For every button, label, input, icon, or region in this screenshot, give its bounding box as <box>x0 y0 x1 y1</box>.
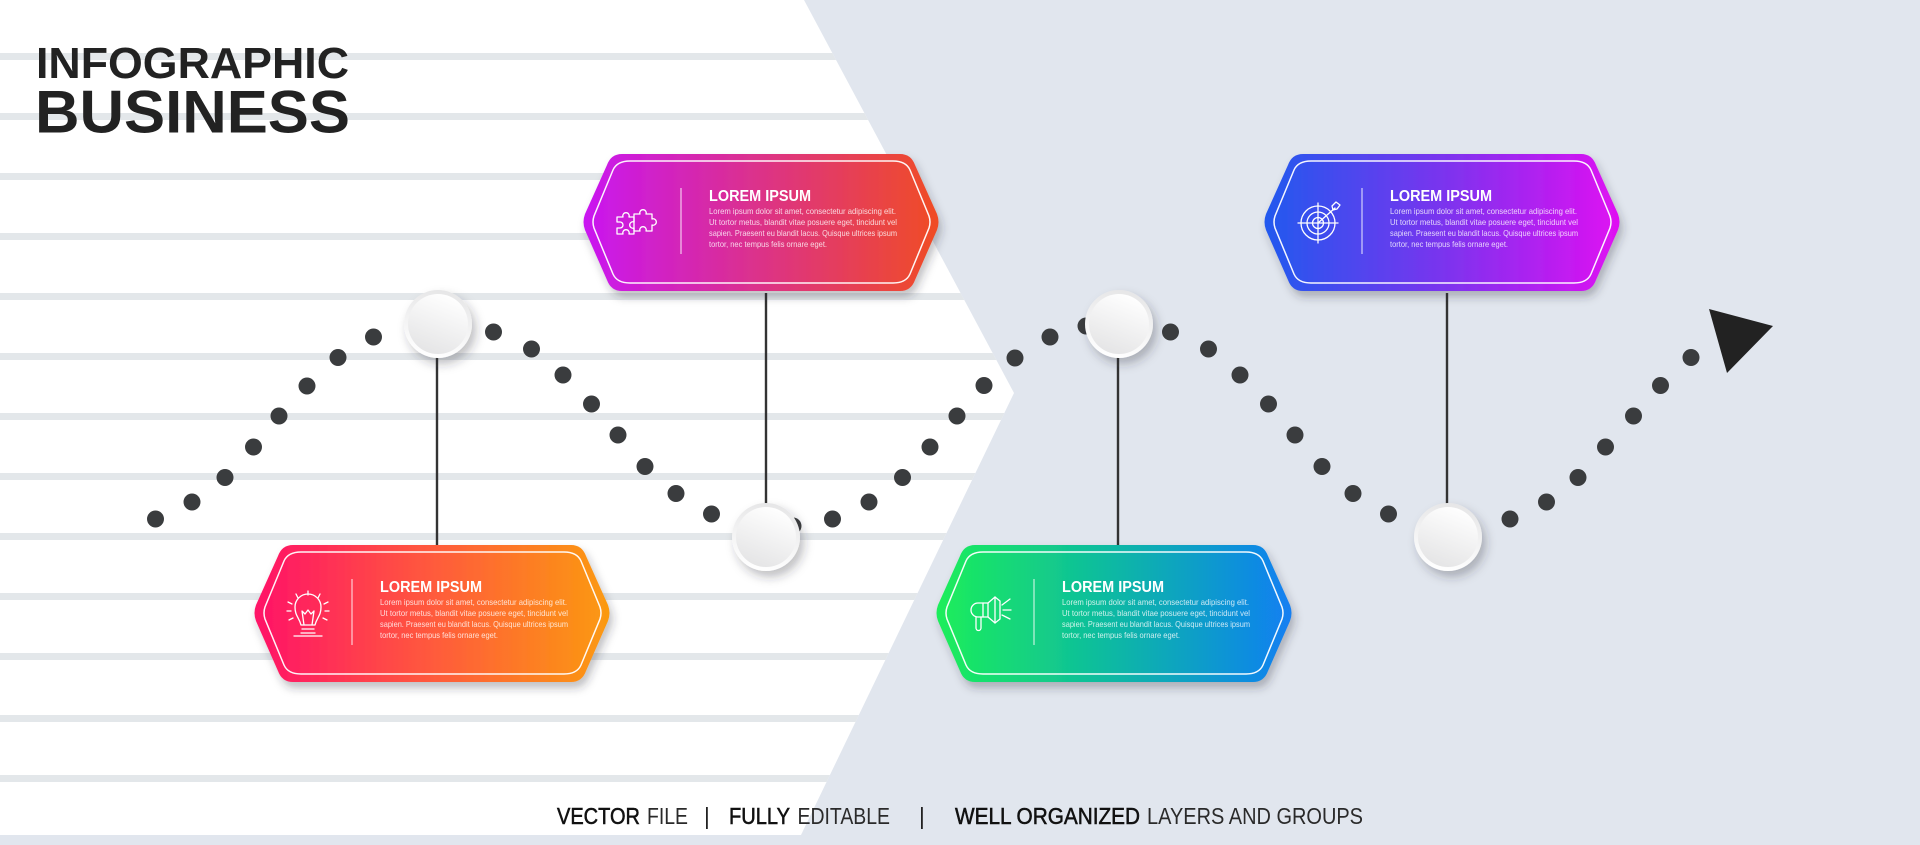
text: card 4: Lorem ipsum dolor sit amet, consectetur adipiscing elit. <box>1390 206 1577 216</box>
footer tagline: FILE <box>647 803 688 829</box>
footer tagline <box>557 803 1363 829</box>
footer tagline: FULLY <box>729 803 790 829</box>
icon: target <box>1298 202 1340 243</box>
icon: light bulb <box>287 591 329 636</box>
arrow head <box>1709 309 1773 373</box>
panel: card 3 green-blue <box>936 545 1292 682</box>
footer tagline: WELL ORGANIZED <box>955 803 1140 829</box>
text: card 3: sapien. Praesent eu blandit lacus. Quisque ultrices ipsum <box>1062 619 1250 629</box>
node 1 <box>404 290 472 358</box>
dotted wave path <box>147 318 1700 534</box>
text: card 2: sapien. Praesent eu blandit lacus. Quisque ultrices ipsum <box>709 228 897 238</box>
text: card 1: Ut tortor metus, blandit vitae posuere eget, tincidunt vel <box>380 608 568 618</box>
text: card 1 <box>380 579 568 640</box>
text: card 4: Ut tortor metus, blandit vitae posuere eget, tincidunt vel <box>1390 217 1578 227</box>
text: card 3: LOREM IPSUM <box>1062 579 1164 596</box>
text: card 2: Lorem ipsum dolor sit amet, consectetur adipiscing elit. <box>709 206 896 216</box>
text: card 3: Ut tortor metus, blandit vitae posuere eget, tincidunt vel <box>1062 608 1250 618</box>
text: card 4: LOREM IPSUM <box>1390 188 1492 205</box>
title: INFOGRAPHIC <box>36 39 349 88</box>
footer tagline: EDITABLE <box>798 803 890 829</box>
text: card 1: LOREM IPSUM <box>380 579 482 596</box>
panel: card 2 magenta-red <box>584 154 938 291</box>
striped white panel <box>0 0 1100 835</box>
footer tagline: VECTOR <box>557 803 640 829</box>
text: card 3: Lorem ipsum dolor sit amet, consectetur adipiscing elit. <box>1062 597 1249 607</box>
text: card 3 <box>1062 579 1250 640</box>
title: BUSINESS <box>35 78 350 146</box>
icon: puzzle <box>617 210 656 234</box>
panel: card 4 blue-violet <box>1264 154 1620 291</box>
title <box>35 39 350 146</box>
text: card 1: sapien. Praesent eu blandit lacus. Quisque ultrices ipsum <box>380 619 568 629</box>
connector lines <box>437 293 1447 546</box>
text: card 3: tortor, nec tempus felis ornare eget. <box>1062 630 1180 640</box>
footer tagline: LAYERS AND GROUPS <box>1147 803 1363 829</box>
text: card 2: LOREM IPSUM <box>709 188 811 205</box>
text: card 2: tortor, nec tempus felis ornare eget. <box>709 239 827 249</box>
text: card 4: tortor, nec tempus felis ornare eget. <box>1390 239 1508 249</box>
node 3 <box>1085 290 1153 358</box>
text: card 2 <box>709 188 897 249</box>
text: card 4 <box>1390 188 1578 249</box>
text: card 4: sapien. Praesent eu blandit lacus. Quisque ultrices ipsum <box>1390 228 1578 238</box>
node 4 <box>1414 503 1482 571</box>
text: card 2: Ut tortor metus, blandit vitae posuere eget, tincidunt vel <box>709 217 897 227</box>
icon: megaphone <box>971 597 1011 630</box>
node 2 <box>732 503 800 571</box>
panel: card 1 orange <box>254 545 610 682</box>
text: card 1: Lorem ipsum dolor sit amet, consectetur adipiscing elit. <box>380 597 567 607</box>
text: card 1: tortor, nec tempus felis ornare eget. <box>380 630 498 640</box>
